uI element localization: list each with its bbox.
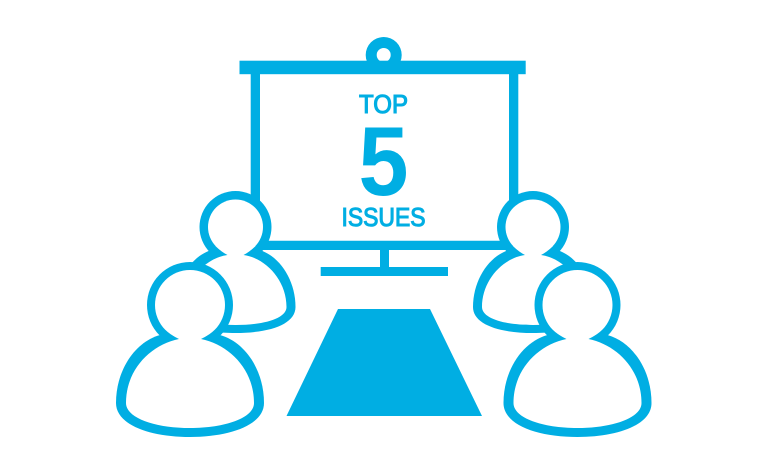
icon: hanging ring bbox=[366, 37, 402, 73]
screen top bar bbox=[240, 61, 526, 74]
person: back left bbox=[176, 191, 296, 333]
meeting table bbox=[286, 309, 482, 416]
person: front right bbox=[504, 262, 652, 437]
heading: top: TOP bbox=[359, 89, 408, 119]
person: front left bbox=[116, 262, 264, 437]
projection screen bbox=[240, 37, 526, 276]
screen frame bbox=[251, 74, 518, 250]
screen stand bbox=[321, 250, 448, 276]
person: back right bbox=[473, 191, 593, 333]
big number 5: 5 bbox=[358, 106, 408, 216]
title text bbox=[342, 89, 426, 232]
heading: issues: ISSUES bbox=[342, 202, 426, 232]
